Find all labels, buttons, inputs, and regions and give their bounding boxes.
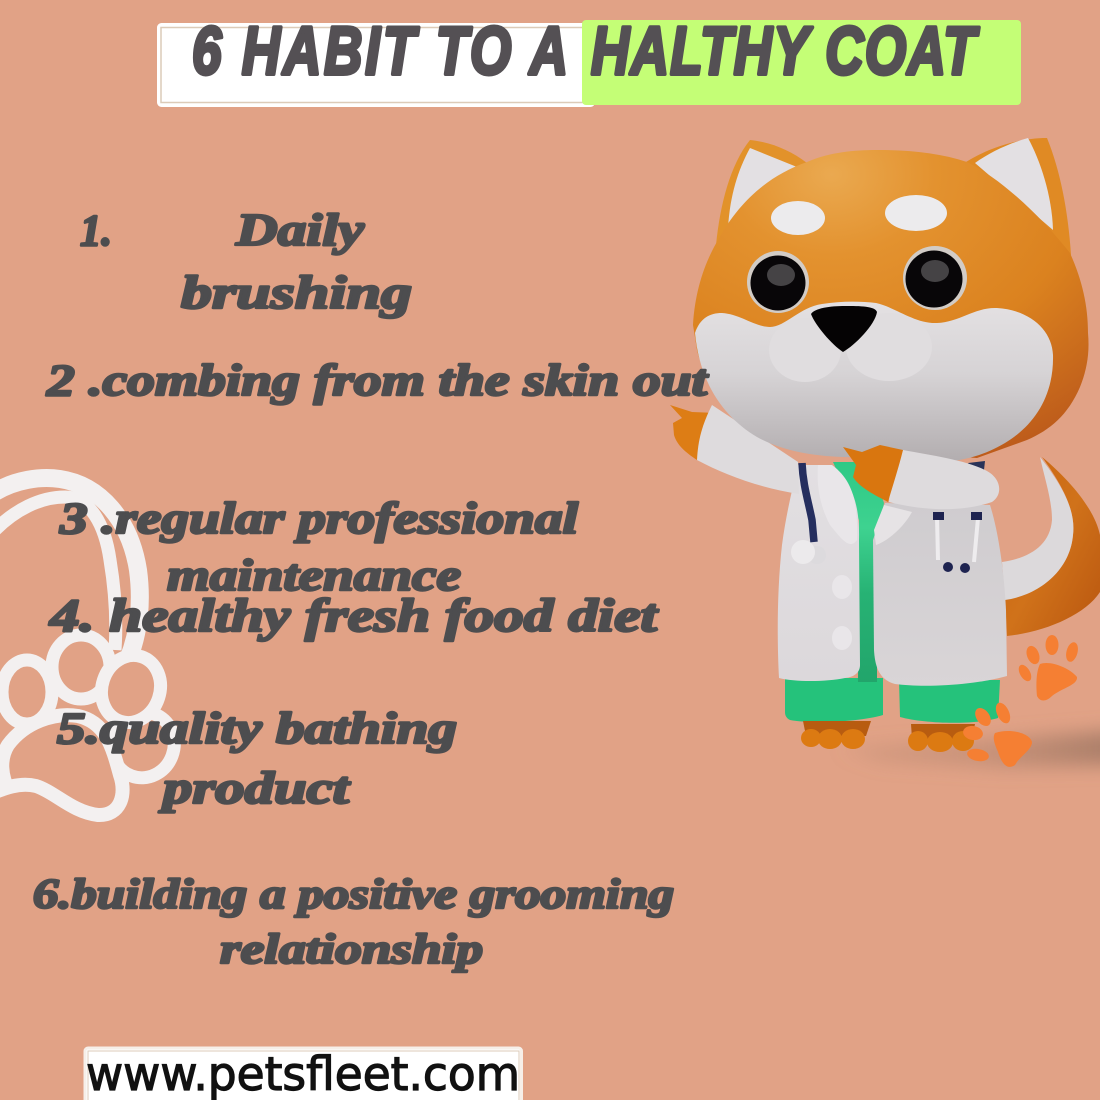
habit 5 text	[57, 704, 457, 813]
left lapel	[818, 465, 857, 544]
eyebrow patches	[771, 195, 947, 235]
habit 3 text: maintenance	[167, 551, 461, 600]
tail	[1002, 457, 1100, 636]
habit 4 text: 4. healthy fresh food diet	[49, 590, 659, 642]
feet	[801, 721, 975, 752]
icon: orange paw print lower	[962, 700, 1032, 767]
coat left	[778, 465, 860, 681]
website text: www.petsfleet.com	[86, 1047, 520, 1100]
nose	[811, 306, 877, 352]
coat buttons	[832, 575, 852, 650]
stethoscope	[791, 461, 985, 573]
head	[693, 138, 1089, 462]
habit 3 text: 3 .regular professional	[59, 494, 579, 543]
habit 6 text	[33, 872, 674, 973]
muzzle	[695, 302, 1053, 462]
green shirt	[833, 462, 884, 682]
right ear	[966, 138, 1071, 255]
icon: white outline paw with ring	[0, 478, 183, 815]
trousers	[785, 678, 1000, 723]
habit 2 text: 2 .combing from the skin out	[46, 356, 709, 405]
illustration: doctor shiba dog	[670, 138, 1100, 768]
icon: orange paw print upper	[1016, 635, 1080, 700]
cheeks	[769, 313, 932, 382]
habit 6 text: relationship	[220, 927, 483, 973]
habit 5 text: product	[158, 763, 351, 813]
habit 1 text	[181, 204, 412, 319]
left eye	[747, 251, 809, 313]
website box	[85, 1047, 522, 1100]
right lapel	[874, 505, 912, 545]
left ear	[716, 140, 807, 265]
title: green highlight box	[582, 20, 1021, 105]
heading: left part: 6 HABIT TO A	[192, 13, 568, 88]
head base	[693, 150, 1089, 458]
habit 1 text: Daily	[235, 204, 365, 255]
heading: right part: HALTHY COAT	[591, 13, 980, 88]
habit 5 text: 5.quality bathing	[57, 704, 457, 753]
habit 6 text: 6.building a positive grooming	[33, 872, 674, 918]
habit 3 text	[59, 494, 579, 600]
right arm and hand	[843, 445, 999, 509]
ground shadow	[840, 730, 1100, 768]
coat right	[873, 503, 1007, 686]
title: left white box	[158, 24, 594, 106]
left arm and hand	[670, 405, 799, 494]
habit 1 text: brushing	[181, 267, 412, 319]
right eye	[903, 246, 967, 310]
habit 1 number: 1.	[80, 206, 112, 255]
